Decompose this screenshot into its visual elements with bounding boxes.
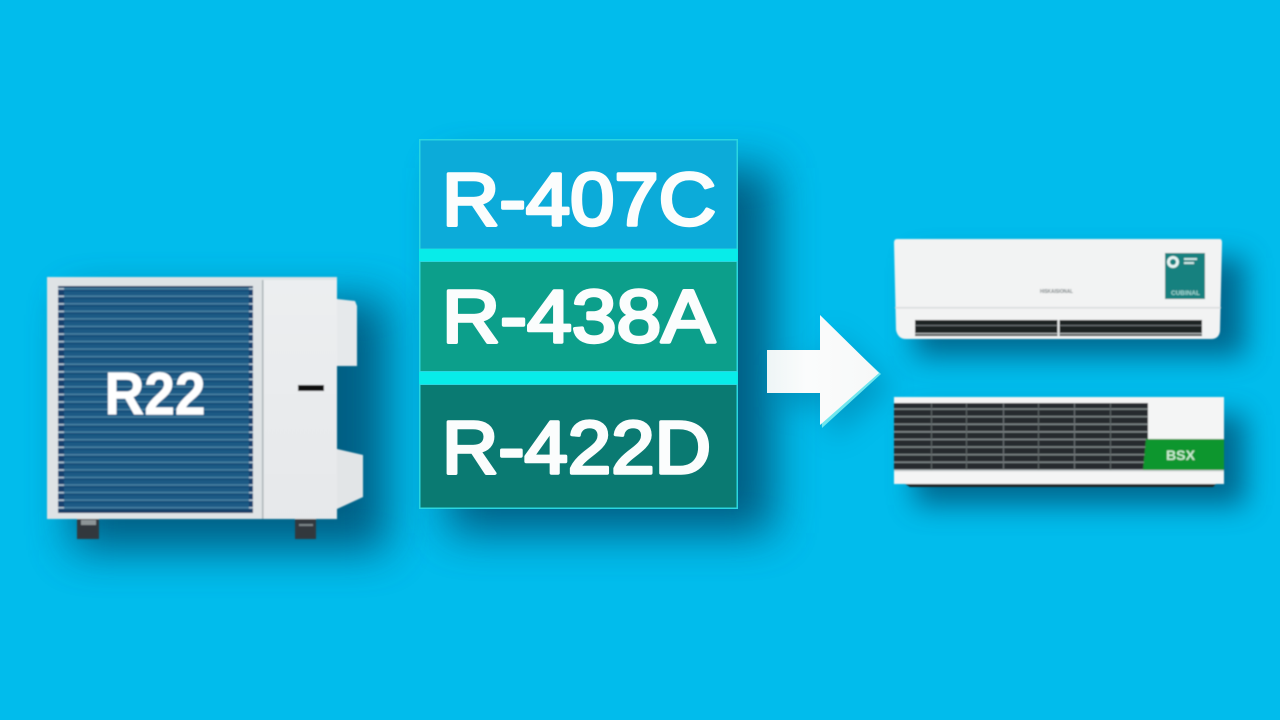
row: R-407C xyxy=(420,140,736,248)
label: R22: R22 xyxy=(104,360,206,428)
air vent xyxy=(915,320,1202,336)
divider: cyan band xyxy=(419,249,738,261)
unit casing xyxy=(47,277,337,519)
outdoor unit: R22 xyxy=(47,277,363,539)
condenser coil xyxy=(58,286,253,513)
energy label xyxy=(1165,253,1205,299)
green badge: BSX xyxy=(1166,447,1196,463)
arrow xyxy=(767,315,881,428)
panel frame xyxy=(419,139,738,509)
icon: mounting feet xyxy=(77,519,316,539)
row: R-438A xyxy=(420,262,736,371)
handle slot xyxy=(298,385,324,391)
front grille xyxy=(894,403,1148,470)
indoor unit: bottom grille unit xyxy=(894,397,1224,487)
casing xyxy=(894,239,1222,339)
row: R-422D: R-422D xyxy=(442,406,711,489)
divider: cyan band xyxy=(419,372,738,384)
energy label: CUBINAL xyxy=(1171,291,1200,297)
shadows behind objects xyxy=(72,168,1245,550)
service panel xyxy=(262,280,337,519)
row: R-422D xyxy=(420,385,736,508)
side service tabs xyxy=(337,299,363,509)
casing xyxy=(894,397,1224,484)
green badge xyxy=(1143,439,1224,470)
row: R-438A: R-438A xyxy=(442,275,716,358)
panel: alternative refrigerants xyxy=(419,139,738,509)
brand text: HISKAISIONAL xyxy=(1040,289,1073,295)
bottom slit xyxy=(905,484,1216,487)
row: R-407C: R-407C xyxy=(442,158,716,241)
indoor unit: top wall split xyxy=(894,239,1222,339)
